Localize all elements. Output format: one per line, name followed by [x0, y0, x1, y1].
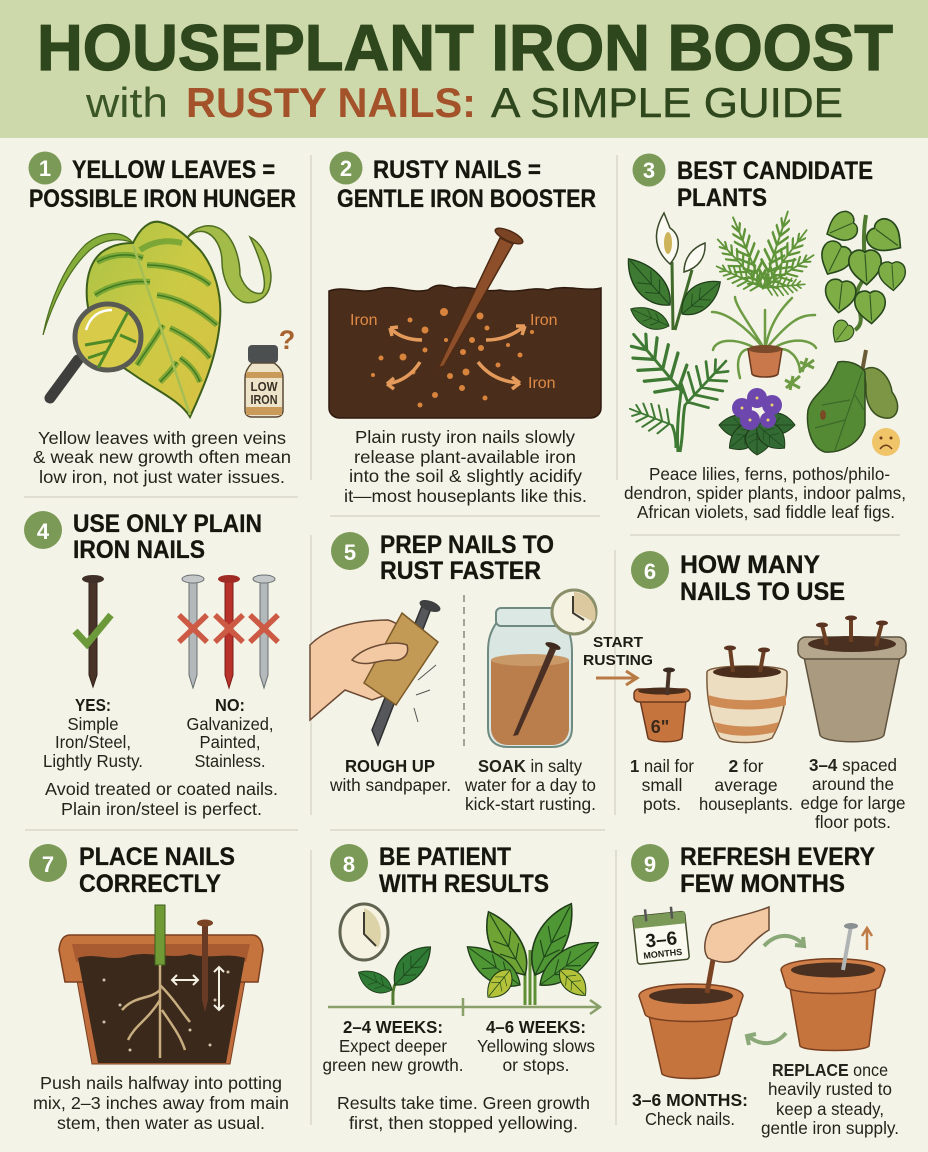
small pot text: 1 nail for [630, 756, 694, 776]
small pot text: pots. [643, 794, 681, 814]
milestone 4-6 weeks: or stops. [502, 1055, 570, 1075]
yes text: Lightly Rusty. [43, 751, 143, 771]
heading 5: RUST FASTER [380, 557, 541, 585]
heading 6: HOW MANY [680, 551, 820, 579]
text 1: low iron, not just water issues. [39, 467, 285, 487]
text 7: mix, 2–3 inches away from main [33, 1093, 289, 1113]
heading 1 [29, 156, 296, 213]
icon: mason jar with nail [488, 608, 572, 747]
icon: small pot: 6" [651, 717, 669, 737]
start rusting label: START [593, 634, 643, 651]
badge 9: 9 [644, 852, 656, 877]
heading 2 [337, 156, 596, 213]
iron labels [350, 312, 558, 392]
icon: pothos [813, 209, 910, 348]
spacing arrows [172, 967, 224, 1010]
heading 2: GENTLE IRON BOOSTER [337, 185, 596, 213]
large pot text: edge for large [800, 793, 906, 813]
badge 2 [330, 152, 362, 184]
heading 7: PLACE NAILS [79, 843, 235, 871]
icon: hand with sandpaper [310, 598, 442, 745]
replace text: gentle iron supply. [761, 1118, 899, 1138]
badge 5: 5 [344, 540, 356, 565]
heading 5 [380, 531, 554, 585]
icon: hand [705, 907, 769, 962]
badge 5 [331, 532, 369, 570]
iron labels: Iron [528, 375, 556, 392]
heading 4 [73, 510, 262, 564]
check nails text [632, 1090, 748, 1129]
icon: medium pot [707, 646, 787, 742]
small pot text: small [642, 775, 682, 795]
no text: Galvanized, [186, 714, 274, 734]
check nails text: Check nails. [645, 1109, 735, 1129]
badge 6 [631, 551, 669, 589]
icon: yellowing leaf [43, 222, 271, 417]
heading 2: RUSTY NAILS = [373, 156, 541, 184]
icon: fern [711, 209, 819, 297]
icon: right pot with new nail [781, 923, 885, 1050]
icon: calendar: 3–6 [644, 928, 678, 952]
badge 3: 3 [643, 158, 655, 183]
icon: fiddle leaf fig [808, 350, 900, 456]
panel 4: use only plain iron nails [24, 510, 278, 819]
icon: large pot [798, 616, 906, 742]
heading 8 [379, 843, 549, 898]
icon: sad face [872, 428, 900, 456]
milestone 4-6 weeks: 4–6 WEEKS: [486, 1017, 586, 1037]
icon: clock [552, 590, 596, 634]
text 8: first, then stopped yellowing. [349, 1113, 578, 1133]
heading 9 [680, 843, 875, 898]
arrow: cycle back [747, 1033, 786, 1045]
text 3: dendron, spider plants, indoor palms, [624, 483, 906, 503]
badge 4 [24, 511, 62, 549]
heading 7 [79, 843, 235, 898]
milestone 2-4 weeks: green new growth. [322, 1055, 464, 1075]
rough up text: ROUGH UP [345, 756, 435, 776]
heading 3: PLANTS [677, 184, 767, 212]
large pot text [800, 755, 906, 832]
icon: plain nail with check [75, 575, 111, 687]
iron arrows [387, 326, 525, 389]
replace text [761, 1060, 899, 1138]
badge 6: 6 [644, 559, 656, 584]
text 3 [624, 464, 906, 522]
heading 6: NAILS TO USE [680, 578, 845, 606]
text 2: into the soil & slightly acidify [349, 466, 582, 486]
badge 1: 1 [39, 156, 51, 181]
heading 4: IRON NAILS [73, 536, 205, 564]
icon: calendar [632, 905, 689, 964]
text 2 [344, 427, 587, 506]
rough up text: with sandpaper. [329, 775, 451, 795]
badge 3 [632, 154, 666, 186]
text 3: African violets, sad fiddle leaf figs. [637, 502, 895, 522]
icon: left pot with nail [639, 943, 743, 1078]
yes text: Iron/Steel, [55, 732, 131, 752]
arrow: cycle forward [764, 936, 804, 946]
badge 8: 8 [343, 852, 355, 877]
soak text [464, 756, 596, 814]
icon: seedling [354, 938, 438, 1005]
text 8: Results take time. Green growth [337, 1093, 590, 1113]
badge 9 [631, 844, 669, 882]
large pot text: around the [812, 774, 894, 794]
average pot text: average [714, 775, 778, 795]
start rusting label: RUSTING [583, 652, 653, 669]
heading 7: CORRECTLY [79, 870, 221, 898]
no text: Stainless. [194, 751, 266, 771]
milestone 2-4 weeks: Expect deeper [339, 1036, 447, 1056]
text 2: it—most houseplants like this. [344, 486, 587, 506]
yes text: Simple [68, 714, 118, 734]
badge 4: 4 [37, 519, 50, 544]
nail [197, 920, 213, 1012]
text 2: release plant-available iron [354, 447, 576, 467]
icon: african violet [719, 388, 795, 457]
icon: low iron bottle: LOW [250, 379, 278, 394]
text 4: Plain iron/steel is perfect. [61, 799, 262, 819]
icon: low iron bottle [245, 325, 295, 417]
replace text: keep a steady, [776, 1099, 884, 1119]
heading 8: BE PATIENT [379, 843, 511, 871]
milestone 2-4 weeks [322, 1017, 464, 1075]
illustration: soil with nail [329, 225, 601, 418]
rough up text [329, 756, 451, 795]
no text: Painted, [200, 732, 260, 752]
text 3: Peace lilies, ferns, pothos/philo- [649, 464, 890, 484]
panel 1: yellow leaves [28, 152, 296, 487]
replace text: REPLACE once [772, 1060, 888, 1080]
panel 2: rusty nails [329, 152, 601, 506]
heading 3 [677, 157, 873, 212]
text 7: Push nails halfway into potting [40, 1073, 282, 1093]
small pot text [630, 756, 694, 814]
text 2: Plain rusty iron nails slowly [355, 427, 575, 447]
badge 7: 7 [42, 852, 54, 877]
no text [186, 695, 274, 771]
panel 9: refresh [631, 843, 899, 1138]
illustration: cutaway pot [59, 905, 263, 1064]
heading 6 [680, 551, 845, 606]
heading 3: BEST CANDIDATE [677, 157, 873, 185]
average pot text: 2 for [728, 756, 764, 776]
no text: NO: [215, 695, 245, 715]
heading 9: FEW MONTHS [680, 870, 845, 898]
soak text: water for a day to [464, 775, 596, 795]
subtitle: with [85, 79, 168, 126]
large pot text: 3–4 spaced [809, 755, 897, 775]
yes text [43, 695, 143, 771]
timeline arrow [328, 998, 600, 1016]
icon: clock [340, 904, 388, 960]
replace text: heavily rusted to [768, 1079, 892, 1099]
subtitle: RUSTY NAILS: [186, 79, 476, 126]
icon: rejected nails [179, 575, 278, 688]
subtitle [85, 79, 843, 126]
icon: spider plant [712, 297, 816, 390]
yes text: YES: [75, 695, 111, 715]
badge 1 [28, 152, 62, 184]
text 4 [45, 779, 278, 819]
milestone 2-4 weeks: 2–4 WEEKS: [343, 1017, 443, 1037]
text 4: Avoid treated or coated nails. [45, 779, 278, 799]
panel 8: be patient [322, 843, 605, 1133]
heading 1: POSSIBLE IRON HUNGER [29, 185, 296, 213]
check nails text: 3–6 MONTHS: [632, 1090, 748, 1110]
heading 8: WITH RESULTS [379, 870, 549, 898]
icon: calendar: MONTHS [643, 947, 683, 961]
heading 1: YELLOW LEAVES = [72, 156, 275, 184]
iron labels: Iron [530, 312, 558, 329]
heading 5: PREP NAILS TO [380, 531, 554, 559]
milestone 4-6 weeks: Yellowing slows [477, 1036, 595, 1056]
heading 4: USE ONLY PLAIN [73, 510, 262, 538]
heading 9: REFRESH EVERY [680, 843, 875, 871]
milestone 4-6 weeks [477, 1017, 595, 1075]
icon: peace lily [618, 213, 727, 335]
arrow: start rusting [596, 671, 637, 685]
text 1 [33, 428, 291, 487]
icon: small pot [634, 668, 690, 742]
text 1: & weak new growth often mean [33, 447, 291, 467]
text 8 [337, 1093, 590, 1133]
badge 7 [29, 844, 67, 882]
large pot text: floor pots. [815, 812, 891, 832]
title: HOUSEPLANT IRON BOOST [37, 11, 893, 84]
subtitle: A SIMPLE GUIDE [491, 79, 843, 126]
average pot text [699, 756, 793, 814]
icon: grown plant [459, 896, 605, 1005]
panel 7: place nails [29, 843, 289, 1133]
text 7 [33, 1073, 289, 1133]
icon: low iron bottle: ? [279, 325, 295, 355]
start rusting label [583, 634, 653, 669]
average pot text: houseplants. [699, 794, 793, 814]
text 1: Yellow leaves with green veins [38, 428, 286, 448]
panel 6: how many nails [630, 551, 906, 832]
panel 3: candidate plants [617, 154, 910, 522]
badge 2: 2 [340, 156, 352, 181]
text 7: stem, then water as usual. [57, 1113, 265, 1133]
icon: low iron bottle: IRON [250, 392, 278, 407]
panel 5: prep nails [310, 531, 653, 814]
soak text: SOAK in salty [478, 756, 582, 776]
badge 8 [330, 844, 368, 882]
title banner [0, 0, 928, 138]
soak text: kick-start rusting. [465, 794, 596, 814]
iron labels: Iron [350, 312, 378, 329]
icon: palm [617, 320, 741, 452]
